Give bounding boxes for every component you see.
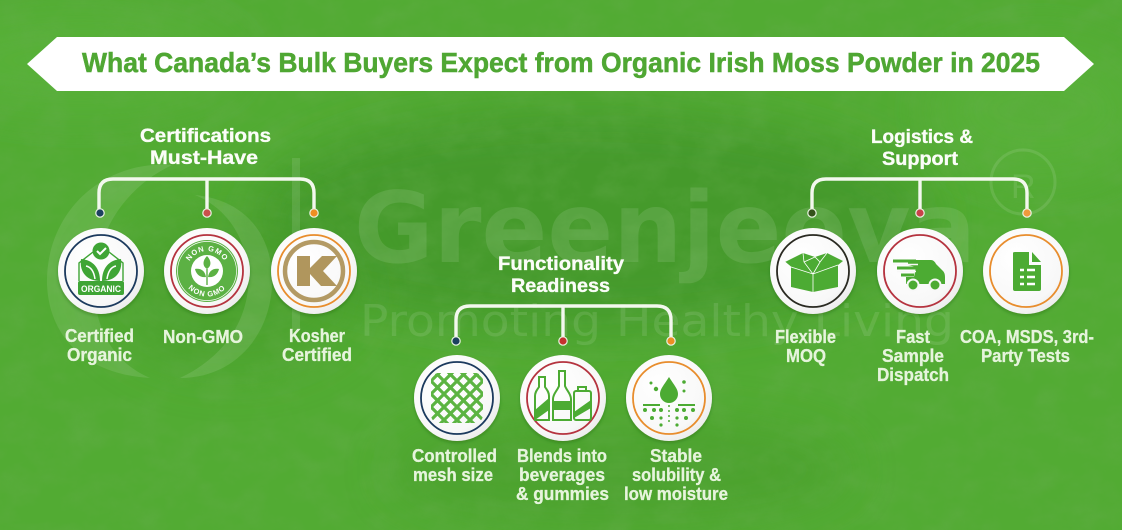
label: Flexible MOQ: MOQ — [786, 346, 826, 366]
icon: kosher K — [271, 228, 357, 314]
label: COA, MSDS, 3rd-Party Tests — [960, 327, 1094, 366]
label: Certified Organic — [65, 326, 134, 365]
label: Stable solubility & low moisture — [624, 446, 728, 504]
label: Non-GMO: Non-GMO — [163, 327, 243, 347]
heading: Logistics & Support — [871, 127, 973, 170]
title: What Canada’s Bulk Buyers Expect from Organic Irish Moss Powder in 2025 — [82, 47, 1040, 78]
label: COA, MSDS, 3rd-Party Tests: COA, MSDS, 3rd- — [960, 327, 1094, 347]
bracket connector — [812, 179, 1027, 210]
icon: certified organic — [58, 228, 144, 314]
watermark: Greenjeeva logo: Greenjeeva — [354, 172, 976, 286]
watermark: Greenjeeva logo — [47, 150, 1055, 378]
bracket connector — [99, 179, 314, 210]
label: Fast Sample Dispatch: Dispatch — [877, 365, 949, 385]
icon: open box — [770, 228, 856, 314]
watermark: Greenjeeva logo: Promoting Healthy Living — [360, 296, 954, 347]
label: Blends into beverages & gummies: beverages — [519, 465, 605, 485]
label: Blends into beverages & gummies: & gummies — [516, 484, 609, 504]
heading: Certifications Must-Have — [140, 126, 271, 169]
label: Blends into beverages & gummies: Blends into — [517, 446, 607, 466]
icon: non-GMO: NON GMO — [186, 246, 228, 261]
label: Controlled mesh size: mesh size — [413, 465, 493, 485]
icon: mesh — [413, 355, 501, 444]
heading: Certifications Must-Have: Certifications — [140, 126, 271, 147]
label: Flexible MOQ — [775, 327, 836, 366]
label: Certified Organic: Organic — [67, 345, 132, 365]
label: Fast Sample Dispatch — [877, 327, 949, 385]
label: Controlled mesh size — [412, 446, 497, 485]
icon: document — [983, 228, 1069, 314]
label: Kosher Certified — [282, 326, 352, 365]
watermark: Greenjeeva logo: R — [1011, 168, 1036, 206]
bracket connector — [456, 306, 671, 338]
heading: Functionality Readiness — [498, 254, 624, 297]
label: Fast Sample Dispatch: Sample — [882, 346, 944, 366]
heading: Certifications Must-Have: Must-Have — [150, 148, 258, 169]
icon: non-GMO: NON GMO — [188, 284, 224, 296]
icon: certified organic: ORGANIC — [81, 284, 121, 294]
heading: Logistics & Support: Support — [882, 149, 959, 170]
heading: Functionality Readiness: Readiness — [511, 276, 610, 297]
heading: Logistics & Support: Logistics & — [871, 127, 973, 148]
connector dots — [452, 337, 675, 345]
connector dots — [808, 209, 1031, 217]
panel: Logistics & Support — [770, 127, 1094, 385]
icon: delivery truck — [877, 228, 963, 314]
icon: solubility droplet — [626, 355, 712, 441]
label: Stable solubility & low moisture: low moisture — [624, 484, 728, 504]
label: Certified Organic: Certified — [65, 326, 134, 346]
icon: non-GMO — [163, 228, 251, 316]
label: Kosher Certified: Certified — [282, 345, 352, 365]
heading: Functionality Readiness: Functionality — [498, 254, 624, 275]
label: Stable solubility & low moisture: Stable — [650, 446, 702, 466]
panel: Certifications Must-Have — [57, 126, 358, 366]
label: Controlled mesh size: Controlled — [412, 446, 497, 466]
label: Flexible MOQ: Flexible — [775, 327, 836, 347]
title banner — [27, 37, 1094, 91]
label: Stable solubility & low moisture: solubility & — [632, 465, 721, 485]
label: Fast Sample Dispatch: Fast — [896, 327, 930, 347]
label: Kosher Certified: Kosher — [289, 326, 345, 346]
connector dots — [96, 209, 318, 217]
label: COA, MSDS, 3rd-Party Tests: Party Tests — [981, 346, 1070, 366]
label: Blends into beverages & gummies — [516, 446, 609, 504]
panel: Functionality Readiness — [384, 254, 728, 504]
icon: beverages — [520, 355, 606, 441]
